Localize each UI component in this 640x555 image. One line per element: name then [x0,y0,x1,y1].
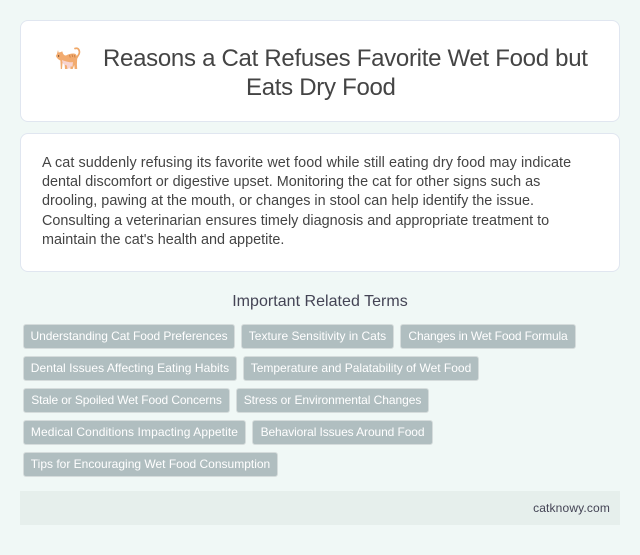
tag [23,356,237,381]
intro text [42,155,571,248]
title line 2: Eats Dry Food [246,74,396,101]
footer site name: catknowy.com [533,501,610,515]
tag [23,452,278,477]
intro text: A cat suddenly refusing its favorite wet food while still eating dry food may indicate [42,155,571,171]
section heading: Important Related Terms [232,293,408,310]
intro text: Consulting a veterinarian ensures timely diagnosis and appropriate treatment to [42,213,549,229]
tag: Temperature and Palatability of Wet Food [251,361,471,375]
tag [23,388,230,413]
title line 1: Reasons a Cat Refuses Favorite Wet Food but [103,45,588,72]
icon: cat [56,47,80,69]
tag: Changes in Wet Food Formula [408,329,568,343]
tag: Medical Conditions Impacting Appetite [31,425,238,439]
tag: Understanding Cat Food Preferences [30,329,228,343]
tag [241,324,394,349]
tag [400,324,576,349]
intro text: maintain the cat's health and appetite. [42,232,284,248]
tag [243,356,479,381]
title card [20,20,620,122]
tag [236,388,429,413]
intro text: dental discomfort or digestive upset. Monitoring the cat for other signs such as [42,174,540,190]
tag [23,420,246,445]
tag: Behavioral Issues Around Food [261,425,424,439]
intro card [20,133,620,272]
intro text: drooling, pawing at the mouth, or changes in stool can help identify the issue. [42,193,534,209]
tag: Texture Sensitivity in Cats [249,329,386,343]
tag: Stale or Spoiled Wet Food Concerns [31,393,222,407]
footer [20,491,620,525]
tag: Dental Issues Affecting Eating Habits [31,361,229,375]
tag [252,420,433,445]
tag [23,324,235,349]
tag: Tips for Encouraging Wet Food Consumption [31,457,270,471]
tag: Stress or Environmental Changes [244,393,421,407]
